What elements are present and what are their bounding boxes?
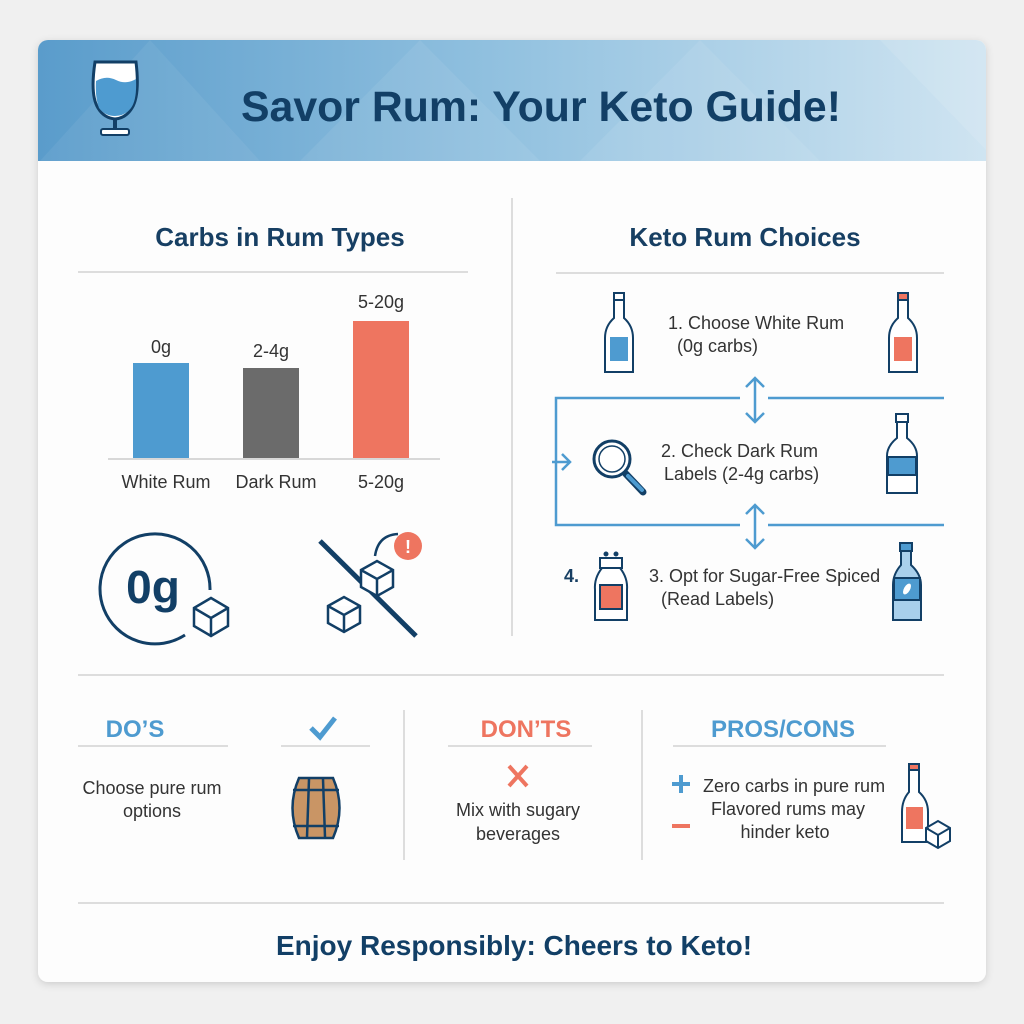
panel: pros/cons: hinder keto [740,822,830,842]
icon: minus [672,824,690,828]
bar chart: 0g [151,337,171,357]
bar chart: White Rum [121,472,211,492]
icon: no sugar: ! [405,537,411,557]
step 2 text: 2. Check Dark Rum [661,441,818,461]
panel: don'ts: beverages [476,824,560,844]
panel: keto rum choices: (0g carbs) [677,336,758,356]
flow lines [552,378,944,548]
header banner [38,40,986,161]
panel: do's [78,716,370,838]
icon: 0g circle [100,534,228,644]
heading: carbs: Carbs in Rum Types [155,222,405,252]
step 4 label: 4. [564,566,579,586]
icon: no sugar [320,532,422,636]
panel: pros/cons: Zero carbs in pure rum [703,776,885,796]
panel: keto rum choices: (Read Labels) [661,589,774,609]
panel: don'ts [448,716,592,844]
bar chart [108,292,440,492]
heading: keto choices: Keto Rum Choices [629,222,861,252]
panel: keto rum choices: Labels (2-4g carbs) [664,464,819,484]
icon: dark bottle [887,414,917,493]
panel: don'ts: DON’TS [481,716,571,743]
step 3 text: 3. Opt for Sugar-Free Spiced [649,566,880,586]
step 1 text: 1. Choose White Rum [668,313,844,333]
icon: 0g circle: 0g [126,561,180,613]
icon: spiced bottle [893,543,921,620]
heading: do's: DO’S [106,716,164,743]
bar chart: 5-20g [358,472,404,492]
panel: pros/cons: PROS/CONS [711,716,855,743]
icon: bottle blue [605,293,633,372]
icon: barrel [292,778,340,838]
title: Savor Rum: Your Keto Guide! [241,83,841,131]
panel: pros/cons: Flavored rums may [711,799,865,819]
bar chart: Dark Rum [235,472,317,492]
panel: carbs in rum types [78,222,468,644]
panel: pros/cons [672,716,950,848]
bar chart: 5-20g [358,292,404,312]
panel: do's: options [123,801,181,821]
panel: don'ts: Mix with sugary [456,800,580,820]
bar chart: 2-4g [253,341,289,361]
footer: Enjoy Responsibly: Cheers to Keto! [276,930,752,961]
icon: wine glass [93,62,137,135]
icon: magnifier [594,441,643,492]
panel: do's: Choose pure rum [82,778,222,798]
icon: spice jar [595,552,627,620]
icon: plus [672,775,690,793]
icon: bottle with ice [902,764,950,848]
icon: check [311,718,335,737]
panel: keto rum choices [552,222,944,620]
icon: x [509,766,527,786]
icon: bottle red [889,293,917,372]
